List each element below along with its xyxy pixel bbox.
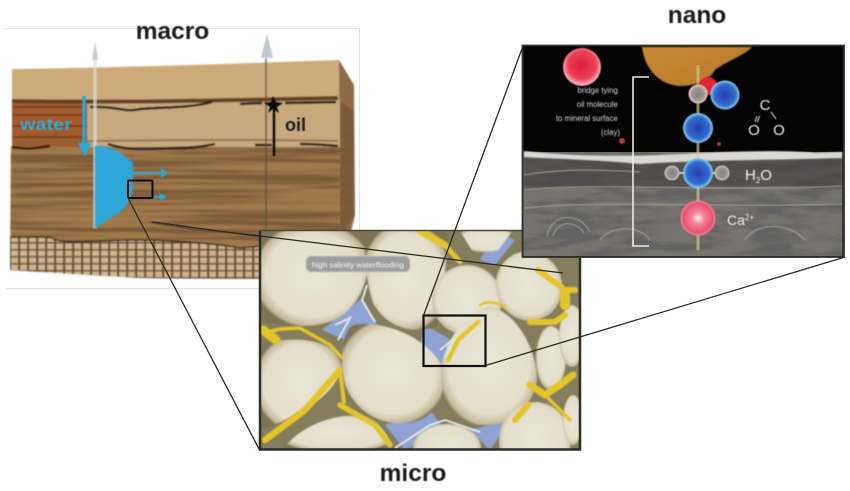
dark fluid background — [522, 45, 844, 257]
oil droplet — [642, 47, 752, 86]
dark seams — [12, 98, 338, 102]
upper dark rock band — [524, 158, 842, 188]
label: water: water — [19, 115, 72, 134]
H2O label: H — [745, 167, 756, 184]
CO2 label — [748, 97, 785, 139]
tag: high salinity waterflooding: high salinity waterflooding — [312, 260, 404, 270]
H2O label: O — [760, 167, 772, 184]
yellow oil films — [263, 231, 575, 445]
panel: micro pore view — [258, 228, 585, 478]
connector lines micro to nano — [424, 46, 845, 366]
micro selection box — [424, 316, 486, 366]
molecular chain rod — [696, 65, 700, 250]
Ca2+ label: Ca — [727, 212, 745, 228]
lower seam — [11, 237, 262, 248]
arrow: oil up — [264, 96, 283, 156]
atoms: carboxyl group on oil — [689, 77, 740, 110]
CO2 label: O — [773, 122, 785, 139]
bracket — [633, 77, 649, 246]
panel: macro reservoir block — [4, 28, 360, 288]
atom: red calcium legend — [563, 48, 601, 86]
Ca2+ label: 2+ — [745, 213, 754, 222]
caption: bridge tying: to mineral surface — [556, 114, 618, 123]
connector lines macro to micro — [128, 198, 563, 449]
calcium ion — [680, 200, 716, 236]
H2O label: 2 — [756, 176, 761, 185]
pore space — [260, 231, 580, 449]
clay surface highlight — [524, 151, 842, 164]
heading: macro: macro — [136, 18, 209, 45]
water molecule — [664, 158, 730, 188]
reservoir cross-section — [10, 58, 355, 280]
arrow: water injection down — [78, 96, 91, 157]
atom: oxygen — [683, 113, 713, 143]
layered rock curves — [524, 170, 842, 240]
white mineral rims — [335, 232, 505, 448]
blue water-filled pores — [322, 232, 515, 450]
lower striped brown layer — [10, 146, 340, 279]
arrow: water front lower — [152, 193, 167, 201]
water flood plume — [95, 146, 133, 228]
CO2 label: O — [748, 122, 760, 139]
panel frame — [4, 28, 360, 288]
tag: high salinity waterflooding — [306, 256, 410, 272]
heading: nano: nano — [668, 2, 726, 29]
panel: nano molecular view — [522, 45, 844, 257]
sand grains — [258, 228, 585, 478]
caption: bridge tying: bridge tying — [578, 86, 618, 95]
right side face — [339, 60, 355, 280]
oil sand layer — [12, 100, 340, 147]
CO2 label: C — [760, 97, 771, 114]
cross-hatched basement — [10, 237, 262, 279]
macro selection box — [128, 180, 152, 198]
icon: production well derrick — [261, 34, 273, 58]
cap rock layer — [12, 60, 339, 101]
label: oil: oil — [285, 115, 306, 135]
caption: bridge tying: (clay) — [601, 128, 620, 137]
mineral surface — [524, 152, 842, 256]
caption: bridge tying: oil molecule — [577, 100, 618, 109]
micro panel frame — [260, 231, 580, 450]
well shafts — [94, 60, 96, 228]
icon: injection well derrick — [92, 42, 98, 60]
water bearing strip — [12, 102, 87, 147]
atom: small red markers — [619, 138, 721, 146]
heading: micro: micro — [380, 460, 446, 487]
nano panel frame — [522, 46, 844, 257]
arrow: water front upper — [128, 168, 168, 178]
